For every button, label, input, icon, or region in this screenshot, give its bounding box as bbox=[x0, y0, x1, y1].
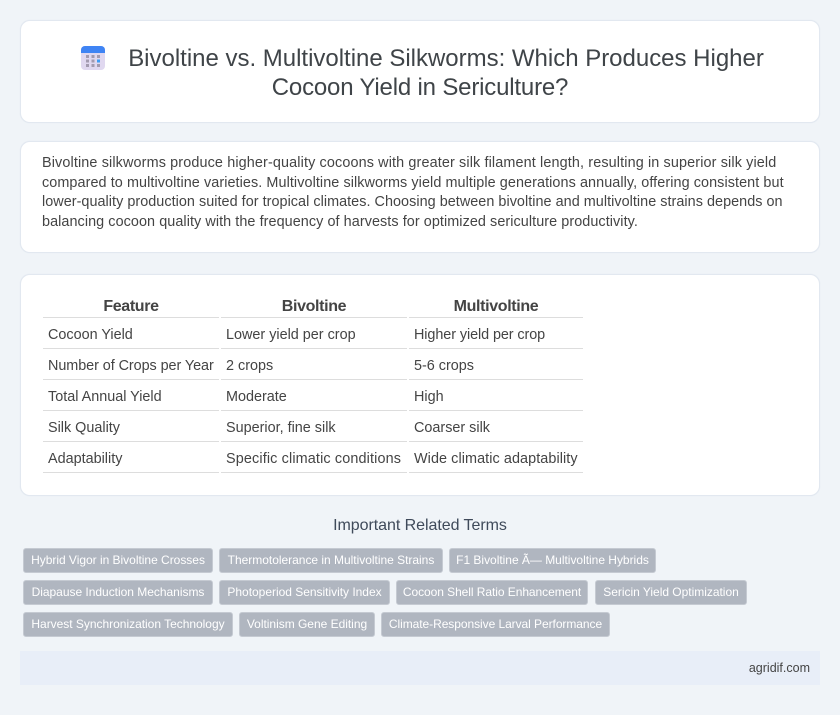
tag: Harvest Synchronization Technology bbox=[31, 617, 225, 631]
column headers: Feature bbox=[103, 298, 159, 315]
intro paragraph: lower-quality production suited for tropical climates. Choosing between bivoltine and multivoltine strains depends on bbox=[42, 194, 783, 210]
intro paragraph bbox=[42, 155, 784, 230]
intro text panel bbox=[20, 141, 820, 253]
row: annual yield bbox=[48, 388, 444, 404]
row: crops per year: 2 crops bbox=[226, 358, 273, 374]
row: cocoon yield: Lower yield per crop bbox=[226, 326, 356, 342]
row: annual yield: High bbox=[414, 388, 444, 404]
column headers: Multivoltine bbox=[454, 298, 538, 315]
tag bbox=[396, 580, 588, 605]
row: cocoon yield: Higher yield per crop bbox=[414, 326, 545, 342]
tag: Hybrid Vigor in Bivoltine Crosses bbox=[31, 553, 205, 567]
column headers: Bivoltine bbox=[282, 298, 346, 315]
row: crops per year bbox=[48, 358, 474, 374]
tag bbox=[23, 612, 233, 637]
title bbox=[128, 45, 764, 101]
row: silk quality: Superior, fine silk bbox=[226, 420, 336, 436]
row: crops per year: 5-6 crops bbox=[414, 358, 474, 374]
title: Bivoltine vs. Multivoltine Silkworms: Which Produces Higher bbox=[128, 45, 764, 72]
row: cocoon yield bbox=[48, 326, 545, 342]
footer bar bbox=[20, 651, 820, 685]
row: adaptability: Specific climatic conditions bbox=[226, 450, 401, 466]
intro paragraph: Bivoltine silkworms produce higher-quality cocoons with greater silk filament length, resulting in superior silk yield bbox=[42, 155, 776, 171]
comparison table panel bbox=[20, 274, 820, 496]
row: adaptability: Adaptability bbox=[48, 450, 122, 466]
tag bbox=[449, 548, 656, 573]
related terms heading: Important Related Terms bbox=[333, 517, 507, 534]
tag: F1 Bivoltine Ã— Multivoltine Hybrids bbox=[456, 553, 649, 567]
column headers bbox=[103, 298, 538, 315]
tag: Cocoon Shell Ratio Enhancement bbox=[403, 585, 581, 599]
tag: Thermotolerance in Multivoltine Strains bbox=[228, 553, 434, 567]
tag: Diapause Induction Mechanisms bbox=[32, 585, 204, 599]
row: annual yield: Moderate bbox=[226, 388, 287, 404]
tag bbox=[219, 548, 443, 573]
title: Cocoon Yield in Sericulture? bbox=[272, 74, 568, 101]
tag bbox=[381, 612, 610, 637]
intro paragraph: balancing cocoon quality with the frequency of harvests for optimized sericulture productivity. bbox=[42, 214, 638, 230]
header card bbox=[20, 20, 820, 123]
intro paragraph: compared to multivoltine varieties. Multivoltine silkworms yield multiple generations annually, offering consistent but bbox=[42, 174, 784, 190]
icon: calendar bbox=[81, 46, 105, 70]
row: silk quality: Silk Quality bbox=[48, 420, 120, 436]
row: annual yield: Total Annual Yield bbox=[48, 388, 162, 404]
tag: Photoperiod Sensitivity Index bbox=[227, 585, 382, 599]
row: silk quality bbox=[48, 420, 490, 436]
tag: Voltinism Gene Editing bbox=[247, 617, 367, 631]
tag bbox=[595, 580, 747, 605]
row: adaptability: Wide climatic adaptability bbox=[414, 450, 578, 466]
row: crops per year: Number of Crops per Year bbox=[48, 358, 214, 374]
tag bbox=[23, 580, 213, 605]
row: adaptability bbox=[48, 450, 578, 466]
footer site name: agridif.com bbox=[749, 661, 810, 675]
tag bbox=[23, 548, 213, 573]
tag bbox=[219, 580, 390, 605]
tag: Climate-Responsive Larval Performance bbox=[389, 617, 602, 631]
comparison table bbox=[43, 298, 583, 473]
row: cocoon yield: Cocoon Yield bbox=[48, 326, 133, 342]
related terms tags bbox=[23, 548, 747, 637]
tag bbox=[239, 612, 375, 637]
row: silk quality: Coarser silk bbox=[414, 420, 490, 436]
tag: Sericin Yield Optimization bbox=[603, 585, 739, 599]
